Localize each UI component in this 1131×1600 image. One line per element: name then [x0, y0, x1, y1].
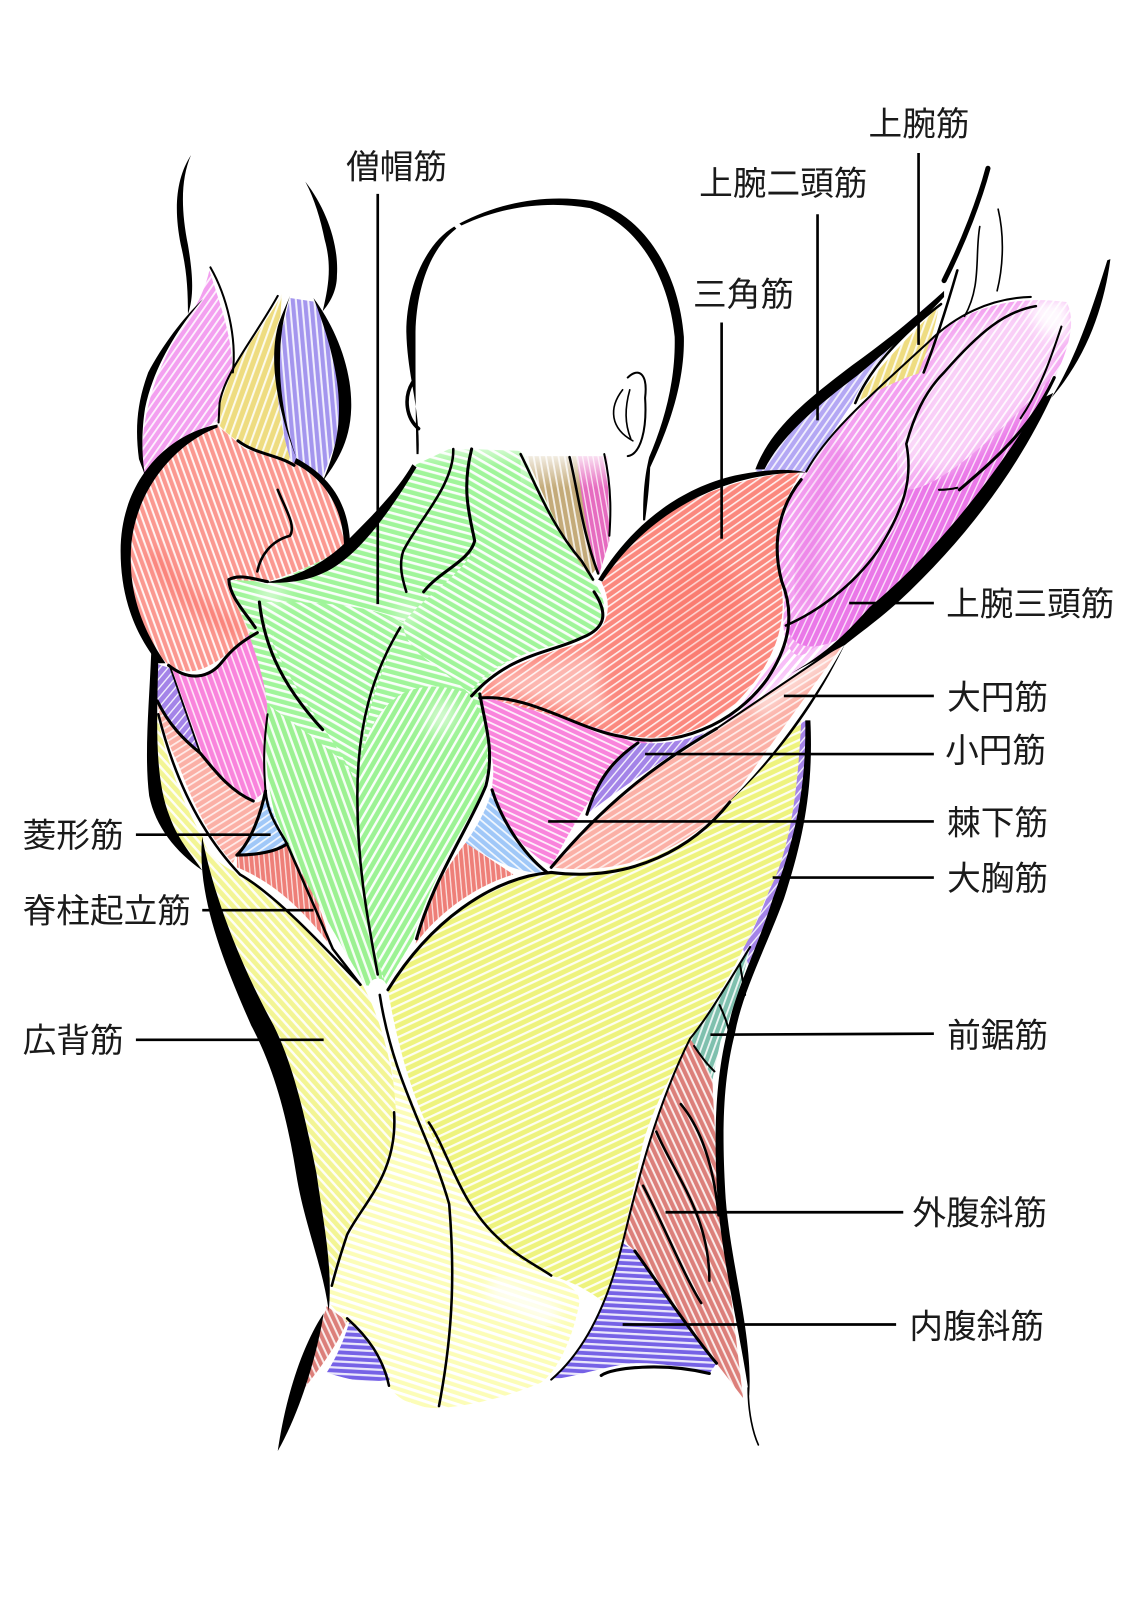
triceps light forearm end [913, 306, 1064, 475]
leader: 小円筋 [645, 753, 934, 755]
serratus anterior [690, 947, 750, 1080]
right rhomboid [466, 790, 547, 873]
leader: 上腕三頭筋 [849, 602, 934, 604]
leader: 上腕筋 [917, 153, 920, 345]
neck magenta muscle [577, 456, 609, 574]
label: 上腕三頭筋: 上腕三頭筋 [946, 585, 1114, 623]
label: 上腕二頭筋: 上腕二頭筋 [699, 165, 867, 203]
leader: 大胸筋 [773, 876, 934, 879]
left lower internal oblique [327, 1322, 390, 1381]
leader: 脊柱起立筋 [202, 909, 313, 912]
label: 棘下筋: 棘下筋 [947, 805, 1048, 843]
trapezius lower left [266, 704, 383, 986]
left latissimus [203, 841, 396, 1291]
left forearm yellow muscle [219, 294, 293, 467]
label: 外腹斜筋: 外腹斜筋 [912, 1194, 1047, 1232]
triceps dark lower edge [786, 378, 1051, 646]
right latissimus [388, 720, 801, 1301]
left deltoid outline [121, 424, 350, 676]
left deltoid [127, 426, 347, 671]
hand fade [1026, 296, 1072, 342]
internal oblique [551, 1243, 717, 1380]
label: 前鋸筋: 前鋸筋 [947, 1017, 1048, 1055]
trapezius lower right [356, 687, 487, 985]
left deltoid red streak [153, 551, 240, 633]
trapezius upper right [403, 449, 604, 694]
left pink infraspinatus [171, 633, 278, 801]
white tendon flare [369, 979, 387, 997]
label: 僧帽筋: 僧帽筋 [346, 149, 447, 187]
right triceps [776, 300, 1071, 655]
trapezius base [227, 449, 604, 986]
label: 内腹斜筋: 内腹斜筋 [909, 1308, 1044, 1346]
left triceps (raised arm) [142, 270, 233, 476]
deltoid pale medial end [490, 653, 612, 719]
lumbar white blotch [490, 1286, 556, 1316]
neck fade [403, 434, 607, 466]
leader: 菱形筋 [136, 833, 271, 836]
head outline [406, 198, 684, 520]
label: 上腕筋: 上腕筋 [869, 106, 970, 144]
left forearm lavender muscle [277, 298, 341, 484]
tendon white spots [260, 592, 449, 730]
leader: 僧帽筋 [376, 194, 379, 604]
left rhomboid [237, 791, 287, 854]
leader: 内腹斜筋 [623, 1323, 896, 1326]
neck brown muscle [526, 456, 597, 577]
teres minor [587, 729, 712, 814]
lumbar fascia [327, 995, 579, 1408]
external oblique [623, 1039, 743, 1398]
right deltoid [480, 471, 801, 738]
trapezius outlines [259, 449, 610, 985]
deltoid red core [633, 551, 745, 665]
label: 小円筋: 小円筋 [945, 732, 1046, 770]
left salmon teres [157, 701, 266, 863]
triceps pale strip [717, 622, 845, 729]
triceps white tendon [903, 423, 913, 474]
right brachialis [853, 306, 939, 404]
leader: 上腕二頭筋 [816, 214, 819, 420]
leader: 棘下筋 [548, 820, 934, 823]
teres major upper fade [755, 653, 832, 709]
torso outlines [147, 644, 845, 1451]
right pectoral strip [743, 720, 807, 964]
label: 広背筋: 広背筋 [23, 1022, 124, 1060]
leader: 前鋸筋 [710, 1034, 934, 1035]
label: 脊柱起立筋: 脊柱起立筋 [23, 892, 191, 930]
left arm outlines [137, 155, 351, 482]
leader: 大円筋 [784, 695, 934, 697]
teres major [551, 642, 845, 869]
leader: 広背筋 [136, 1038, 324, 1041]
label: 大胸筋: 大胸筋 [947, 860, 1048, 898]
triceps darker streak [806, 449, 842, 602]
label: 菱形筋: 菱形筋 [23, 817, 124, 855]
left lower oblique [303, 1306, 347, 1390]
trapezius lower-left shoulder wedge [259, 602, 403, 786]
left erector spinae [237, 844, 333, 949]
label: 三角筋: 三角筋 [693, 276, 794, 314]
right pink infraspinatus [480, 699, 653, 867]
right biceps [755, 294, 941, 471]
right arm outlines [717, 168, 1110, 729]
right erector spinae [416, 843, 513, 944]
left purple teres [155, 663, 200, 753]
leader: 外腹斜筋 [666, 1211, 903, 1214]
right deltoid outline [472, 470, 806, 740]
neck fade upper [521, 447, 612, 488]
label: 大円筋: 大円筋 [947, 679, 1048, 717]
left yellow strip [153, 704, 203, 868]
leader: 三角筋 [720, 322, 723, 539]
panel: back muscle anatomy figure [121, 155, 1110, 1451]
